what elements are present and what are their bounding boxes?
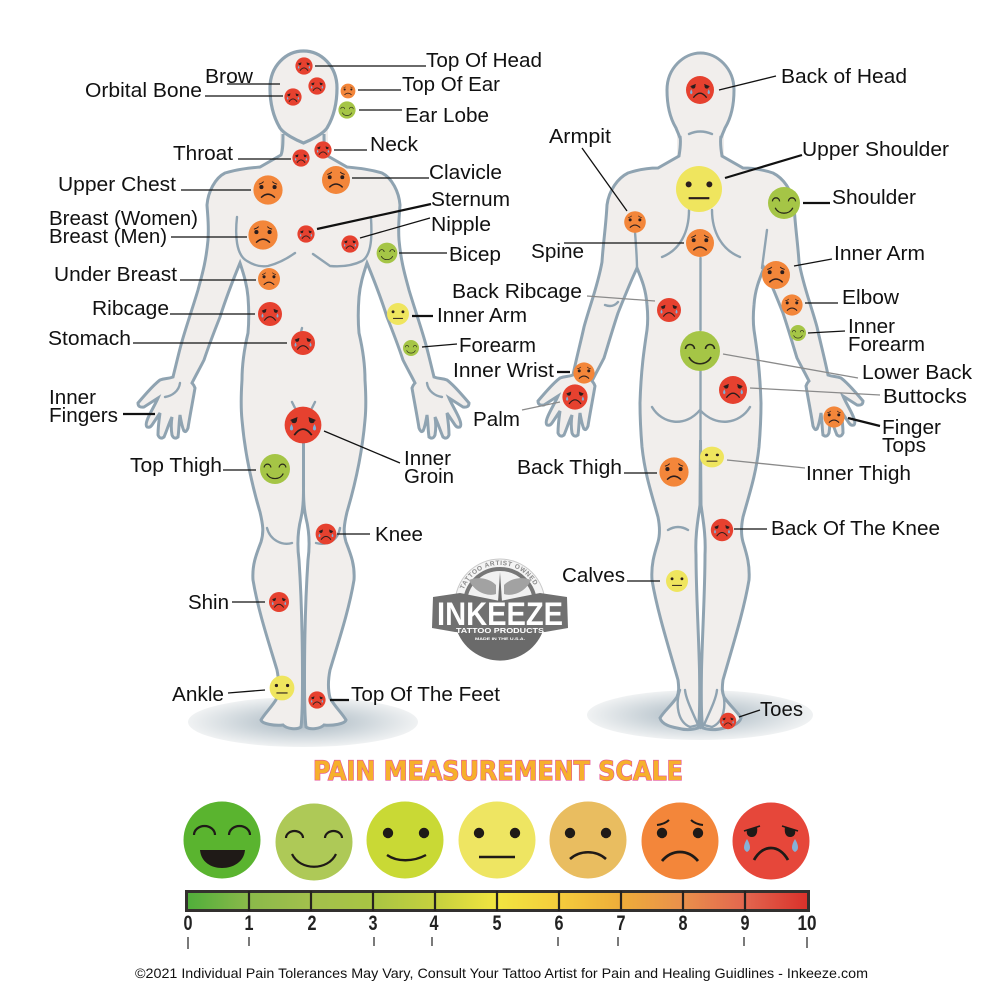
floor shadow front <box>188 697 418 747</box>
title: pain measurement scale: PAIN MEASUREMENT SCALE <box>313 756 683 787</box>
scale faces <box>184 802 810 880</box>
logo: Inkeeze badge: TATTOO ARTIST OWNED <box>460 560 538 588</box>
face 4: slight frown <box>550 802 626 878</box>
labels back: Calves <box>562 565 625 587</box>
labels back: Upper Shoulder <box>802 139 949 161</box>
labels front: Stomach <box>48 328 131 350</box>
marker: brow <box>308 77 326 95</box>
marker: elbow <box>781 294 803 316</box>
labels front: Ear Lobe <box>405 105 489 127</box>
marker: forearm <box>403 340 419 356</box>
labels back: Finger <box>882 417 941 439</box>
labels front: Orbital Bone <box>85 80 202 102</box>
labels front: Ribcage <box>92 298 169 320</box>
labels front: Top Of Head <box>426 50 542 72</box>
pain markers back <box>562 76 845 729</box>
labels front: Breast (Women) <box>49 208 198 230</box>
scale numbers <box>184 912 816 935</box>
marker: ear lobe <box>338 101 356 119</box>
marker: bicep <box>377 243 397 263</box>
marker: back ribcage <box>657 298 681 322</box>
leader lines front <box>123 66 457 700</box>
labels back: Back Thigh <box>517 457 622 479</box>
labels back: Back Of The Knee <box>771 518 940 540</box>
scale numbers: 5 <box>492 912 502 935</box>
marker: breast <box>248 220 278 250</box>
labels back: Inner Wrist <box>453 360 554 382</box>
marker: clavicle <box>322 166 350 194</box>
pain markers front <box>248 57 419 709</box>
labels back: Inner Arm <box>834 243 925 265</box>
marker: stomach <box>291 331 315 355</box>
labels front: Clavicle <box>429 162 502 184</box>
marker: nipple <box>341 235 359 253</box>
scale numbers: 2 <box>308 912 316 935</box>
labels front: Knee <box>375 524 423 546</box>
marker: shoulder <box>768 187 800 219</box>
front body fill and outline <box>138 51 469 729</box>
labels back: Armpit <box>549 126 611 148</box>
marker: throat <box>292 149 310 167</box>
logo: Inkeeze badge <box>432 558 568 661</box>
marker: inner arm <box>762 261 790 289</box>
marker: ribcage <box>258 302 282 326</box>
scale numbers: 4 <box>430 912 439 935</box>
marker: finger tops <box>823 406 845 428</box>
labels front: Top Thigh <box>130 455 222 477</box>
labels front: Bicep <box>449 244 501 266</box>
labels back: Shoulder <box>832 187 916 209</box>
labels front: Inner Arm <box>437 305 527 327</box>
marker: top of feet <box>308 691 326 709</box>
labels front: Upper Chest <box>58 174 176 196</box>
marker: back thigh <box>659 457 689 487</box>
labels front: Inner <box>49 387 96 409</box>
marker: orbital bone <box>284 88 302 106</box>
scale numbers: 0 <box>184 912 192 935</box>
marker: inner wrist <box>573 362 595 384</box>
marker: armpit <box>624 211 646 233</box>
leader lines back <box>522 76 880 717</box>
labels back: Back Ribcage <box>452 281 582 303</box>
front body figure <box>138 51 469 747</box>
marker: inner forearm <box>790 325 806 341</box>
labels front <box>48 50 542 706</box>
footer note: ©2021 Individual Pain Tolerances May Vary, Consult Your Tattoo Artist for Pain and Healing Guidlines - Inkeeze.com <box>135 965 868 981</box>
marker: knee <box>316 524 336 544</box>
labels back: Elbow <box>842 287 900 309</box>
labels front: Nipple <box>431 214 491 236</box>
labels back <box>452 66 973 721</box>
logo: Inkeeze badge: TATTOO PRODUCTS <box>456 628 544 635</box>
marker: spine <box>686 229 714 257</box>
labels back: Forearm <box>848 334 925 356</box>
labels back: Buttocks <box>883 386 967 408</box>
back body figure <box>538 53 863 740</box>
labels front: Inner <box>404 448 451 470</box>
marker: neck <box>314 141 332 159</box>
labels front: Ankle <box>172 684 224 706</box>
scale ticks <box>188 937 807 949</box>
labels back: Lower Back <box>862 362 973 384</box>
labels back: Toes <box>760 699 803 721</box>
labels back: Back of Head <box>781 66 907 88</box>
labels front: Brow <box>205 66 254 88</box>
marker: back of the knee <box>711 519 733 541</box>
marker: buttocks <box>719 376 747 404</box>
marker: ankle <box>270 676 294 700</box>
marker: sternum <box>297 225 315 243</box>
floor shadow back <box>587 690 813 740</box>
scale numbers: 9 <box>740 912 750 935</box>
marker: palm <box>562 384 588 410</box>
face 6: crying <box>732 802 810 880</box>
marker: top of head <box>295 57 313 75</box>
face 0: laughing <box>184 802 260 878</box>
labels front: Top Of The Feet <box>351 684 500 706</box>
labels front: Under Breast <box>54 264 177 286</box>
labels back: Tops <box>882 435 926 457</box>
labels back: Inner Thigh <box>806 463 911 485</box>
marker: top thigh <box>260 454 290 484</box>
face 3: neutral <box>458 802 536 878</box>
face 2: smile <box>366 802 444 878</box>
labels back: Inner <box>848 316 895 338</box>
scale numbers: 3 <box>368 912 378 935</box>
scale numbers: 1 <box>244 912 254 935</box>
labels front: Neck <box>370 134 419 156</box>
back body fill and outline <box>538 53 863 730</box>
marker: toes <box>720 713 736 729</box>
labels front: Sternum <box>431 189 510 211</box>
marker: inner groin <box>285 407 321 443</box>
labels back: Palm <box>473 409 520 431</box>
scale numbers: 7 <box>616 912 626 935</box>
face 1: smiling closed eyes <box>276 804 352 880</box>
marker: upper shoulder <box>676 166 722 212</box>
labels front: Breast (Men) <box>49 226 167 248</box>
marker: back of head <box>686 76 714 104</box>
scale numbers: 6 <box>554 912 564 935</box>
labels back: Spine <box>531 241 584 263</box>
logo: Inkeeze badge: INKEEZE <box>437 596 563 632</box>
face 5: worried <box>642 802 718 880</box>
marker: lower back <box>680 331 720 371</box>
labels front: Groin <box>404 466 454 488</box>
marker: upper chest <box>253 175 283 205</box>
marker: calves <box>666 570 688 592</box>
marker: under breast <box>258 268 280 290</box>
labels front: Shin <box>188 592 229 614</box>
marker: shin <box>269 592 289 612</box>
logo: Inkeeze badge: MADE IN THE U.S.A. <box>475 636 525 641</box>
labels front: Fingers <box>49 405 118 427</box>
marker: inner arm <box>387 303 409 325</box>
labels front: Top Of Ear <box>402 74 500 96</box>
labels front: Throat <box>173 143 233 165</box>
gradient bar <box>186 891 808 911</box>
scale numbers: 10 <box>798 912 816 935</box>
marker: inner thigh <box>700 447 724 467</box>
labels front: Forearm <box>459 335 536 357</box>
scale numbers: 8 <box>678 912 688 935</box>
marker: top of ear <box>341 84 355 98</box>
